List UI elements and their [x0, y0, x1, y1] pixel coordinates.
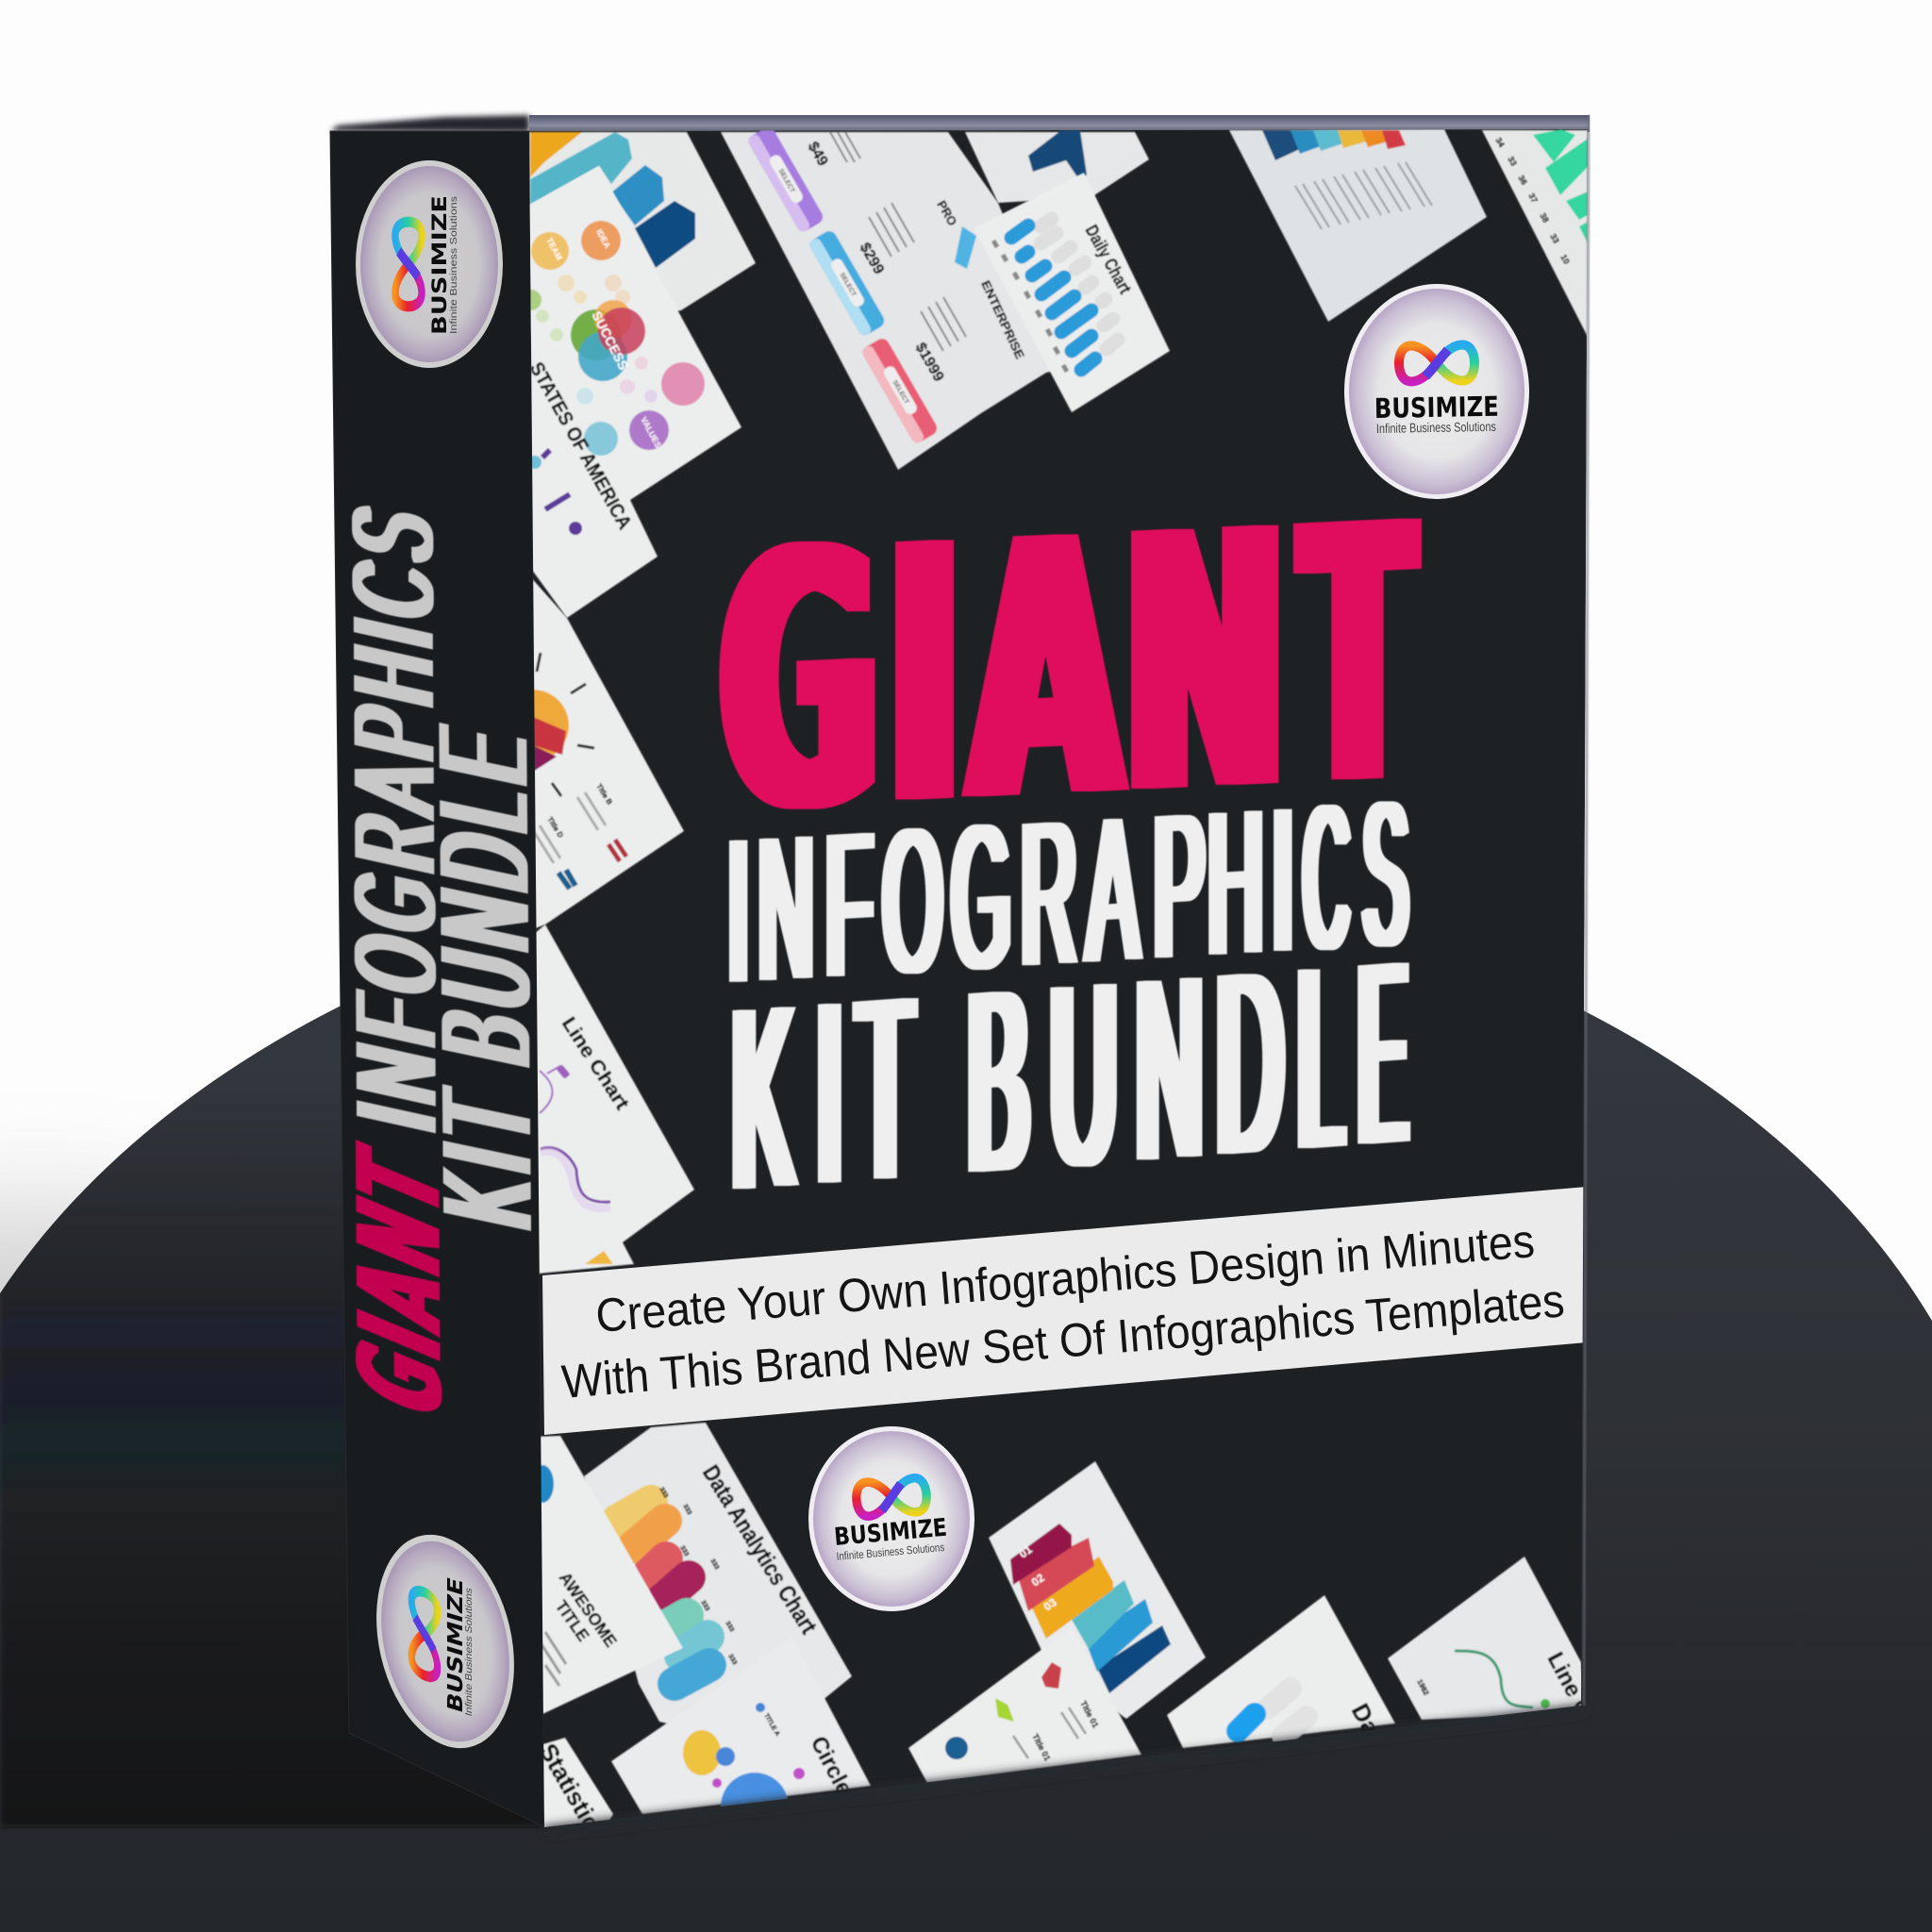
background — [0, 1006, 1932, 1932]
thumbnail: green bars card: 37 — [1526, 192, 1540, 205]
thumbnail: rainbow steps card — [1229, 129, 1487, 322]
thumbnail: success and states of america card: STATES OF AMERICA — [525, 358, 636, 533]
thumbnail: green bars card — [1482, 129, 1588, 337]
thumbnail: circle card: TITLE A — [762, 1713, 780, 1738]
thumbnail: data analytics chart card: 333 — [724, 1621, 735, 1633]
front logo badge bottom: Infinite Business Solutions — [836, 1541, 945, 1563]
front logo badge upper right — [1344, 284, 1529, 499]
thumbnail: title 01 card: Title 01 — [1030, 1732, 1053, 1762]
thumbnail: awesome title card — [531, 1436, 683, 1714]
thumbnail: navy arrow card — [965, 130, 1149, 203]
thumbnail: title 01 card: Title 01 — [1078, 1699, 1101, 1729]
thumbnail: 3D blocks card — [529, 132, 756, 340]
thumbnail: pricing table card: SELECT — [891, 379, 910, 406]
main title: INFOGRAPHICS: INFOGRAPHI — [727, 764, 1293, 1026]
spine logo badge bottom: BUSIMIZE — [443, 1574, 468, 1716]
spine logo badge bottom — [357, 1521, 534, 1762]
thumbnail: pricing table card: SELECT — [777, 168, 796, 194]
front logo badge upper right: Infinite Business Solutions — [1376, 419, 1496, 436]
thumbnail: green bars card: 38 — [1538, 211, 1551, 225]
thumbnail: pricing table card: $299 — [857, 240, 887, 277]
thumbnail: learn circle card: Title D — [545, 815, 565, 840]
spine title: KIT BUNDLE: KIT BUNDLE — [412, 708, 558, 1238]
thumbnail: statistic card: Statistic — [534, 1739, 606, 1836]
front panel — [497, 125, 1597, 1840]
main title: INFOGRAPHICS: C — [1304, 760, 1349, 993]
thumbnail: line chart card right — [1388, 1557, 1597, 1722]
spine title: GIANT: GIANT — [333, 1128, 468, 1434]
spine title: INFOGRAPHICS: INFOGRAPHICS — [328, 489, 460, 1141]
thumbnail: line chart card right: 1982 — [1415, 1678, 1431, 1697]
main title: GIANT: GIAN — [721, 455, 1285, 892]
thumbnail: rainbow arrows card — [989, 1461, 1206, 1719]
thumbnail: green bars card: 10 — [1558, 253, 1572, 266]
thumbnail: data analytics chart card: 333 — [726, 1653, 738, 1666]
thumbnail: success and states of america card: IDEA — [594, 227, 612, 250]
thumbnail: data analytics chart card: 333 — [708, 1558, 720, 1571]
thumbnail: data analytics chart card — [584, 1423, 852, 1745]
main title: KIT BUNDLE: L — [1299, 910, 1342, 1204]
thumbnail: circle card: Circle — [806, 1732, 858, 1800]
thumbnail: data analytics chart card: 333 — [699, 1600, 710, 1612]
thumbnail: rainbow arrows card: 03 — [1041, 1595, 1059, 1613]
thumbnail: pricing table card: ENTERPRISE — [978, 278, 1027, 361]
thumbnail: success and states of america card: VALUES — [639, 415, 663, 450]
thumbnail: line chart card — [534, 924, 694, 1274]
thumbnail: data analytics chart card: 333 — [678, 1545, 690, 1557]
thumbnail: learn circle card — [533, 578, 685, 929]
thumbnail: success and states of america card: SUCCESS — [589, 308, 631, 373]
subtitle line 2: With This Brand New Set Of Infographics Templates — [559, 1274, 1566, 1408]
front logo badge bottom: BUSIMIZE — [833, 1514, 948, 1552]
thumbnail: awesome title card: TITLE — [552, 1597, 593, 1645]
spine panel — [328, 131, 558, 1827]
thumbnail: pricing table card: SELECT — [839, 272, 858, 298]
thumbnail: title 01 card — [908, 1649, 1141, 1783]
spine logo badge bottom: Infinite Business Solutions — [464, 1587, 475, 1718]
thumbnail: pricing table card — [721, 125, 1066, 470]
thumbnail: pricing table card: PRO — [934, 198, 959, 228]
thumbnail: pricing table card: $49 — [805, 140, 831, 169]
thumbnail: data analytics chart card: 333 — [658, 1487, 669, 1499]
subtitle band — [542, 1187, 1587, 1435]
thumbnail: learn circle card: Title B — [594, 782, 614, 807]
thumbnail: circle card — [610, 1698, 872, 1815]
front logo badge upper right: BUSIMIZE — [1374, 391, 1499, 425]
front logo badge bottom — [808, 1426, 974, 1611]
thumbnail: rainbow arrows card: 01 — [1017, 1542, 1035, 1560]
thumbnail: line chart card: Line Chart — [558, 1013, 633, 1114]
thumbnail: daily chart card: Daily Chart — [1081, 222, 1135, 298]
thumbnail: data bars card — [1167, 1595, 1395, 1748]
main title: GIANT: T — [1304, 449, 1412, 866]
thumbnail: daily chart card — [974, 173, 1170, 412]
thumbnail: awesome title card: AWESOME — [556, 1569, 621, 1651]
box top edge — [330, 115, 1590, 132]
main title: INFOGRAPHICS: S — [1363, 758, 1407, 990]
spine logo badge top: Infinite Business Solutions — [449, 196, 459, 334]
thumbnail: success and states of america card — [521, 166, 741, 618]
thumbnail: green bars card: 36 — [1516, 174, 1529, 187]
thumbnail: rainbow arrows card: 02 — [1029, 1571, 1047, 1589]
thumbnail: green bars card: 33 — [1548, 232, 1561, 245]
subtitle line 1: Create Your Own Infographics Design in Minutes — [593, 1214, 1537, 1342]
thumbnail: line chart card right: Line C — [1542, 1648, 1597, 1722]
thumbnail: pricing table card: $1999 — [912, 340, 947, 385]
main title: KIT BUNDLE: KIT BUND — [732, 914, 1283, 1245]
spine logo badge top: BUSIMIZE — [428, 195, 451, 335]
front panel bottom edge feather — [544, 1709, 1585, 1831]
thumbnail: data analytics chart card: Data Analytics Chart — [697, 1460, 823, 1640]
thumbnail: data bars card: Da — [1346, 1699, 1386, 1740]
thumbnail: data analytics chart card: 333 — [681, 1504, 692, 1516]
thumbnail: green bars card: 34 — [1493, 136, 1507, 149]
thumbnail: green bars card: 33 — [1506, 155, 1519, 168]
main title: KIT BUNDLE: E — [1359, 906, 1406, 1200]
thumbnail: success and states of america card: TEAM — [544, 236, 564, 261]
front panel right edge — [1584, 115, 1589, 1706]
spine logo badge top — [356, 160, 503, 368]
